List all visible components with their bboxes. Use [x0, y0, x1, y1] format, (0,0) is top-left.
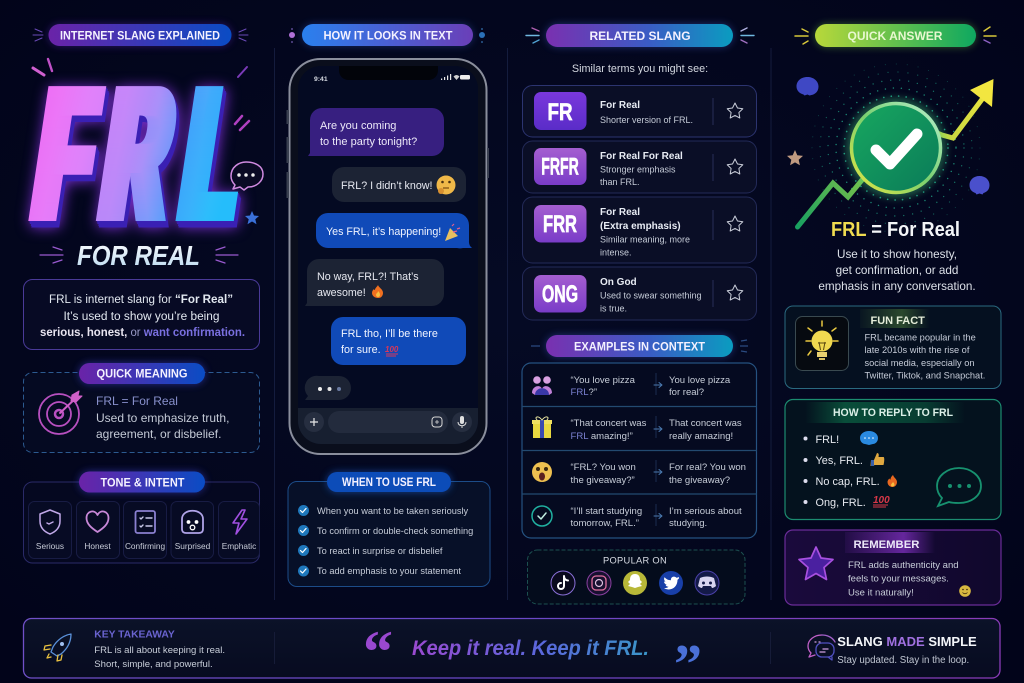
quick answer text: emphasis in any conversation.: [818, 280, 976, 293]
pill heading: related slang: [546, 24, 733, 47]
panel: quick meaning: [24, 363, 260, 452]
quick answer text: [818, 248, 976, 293]
panel: remember: [785, 530, 1001, 605]
fun fact text: [864, 332, 985, 380]
footer banner: [24, 618, 1000, 683]
panel: quick meaning: Used to emphasize truth,: [96, 411, 229, 425]
card: ONG: On God: [600, 277, 637, 288]
column: text conversation: [286, 24, 490, 586]
table: examples: for real?: [669, 387, 704, 398]
quick answer text: get confirmation, or add: [836, 264, 958, 277]
message: FRL I did not know: [332, 167, 466, 202]
pill heading: examples in context: EXAMPLES IN CONTEXT: [574, 339, 706, 353]
icon: twitter: [659, 571, 683, 595]
icon: star: [799, 547, 833, 580]
panel: when to use FRL: [288, 472, 490, 586]
checklist: To react in surprise or disbelief: [317, 546, 443, 556]
message: FRL tho: 100: [385, 345, 399, 354]
tone labels: Surprised: [175, 541, 211, 551]
card: ONG: Used to swear something: [600, 290, 702, 300]
pill heading: internet slang explained: INTERNET SLANG EXPLAINED: [60, 28, 220, 42]
remember text: Use it naturally!: [848, 588, 914, 598]
icon: target: [39, 391, 82, 434]
icon: instagram: [587, 571, 611, 595]
reply list: No cap, FRL.: [816, 476, 880, 488]
table: examples: tomorrow, FRL.”: [570, 518, 639, 529]
pill heading: when to use: WHEN TO USE FRL: [342, 475, 436, 489]
icon: tiktok: [551, 571, 575, 595]
quick answer text: Use it to show honesty,: [837, 248, 957, 261]
subtitle: for real: FOR REAL: [77, 240, 200, 271]
card: FRR: For Real: [600, 207, 640, 218]
fun fact text: Twitter, Tiktok, and Snapchat.: [864, 370, 985, 380]
fun fact text: social media, especially on: [864, 358, 975, 368]
checklist: To confirm or double-check something: [317, 526, 473, 536]
card: ONG: [522, 267, 756, 320]
definition panel: [24, 280, 260, 350]
panel: tone and intent: [24, 472, 260, 563]
message: no way: [305, 259, 444, 306]
slang made simple text: Stay updated. Stay in the loop.: [837, 655, 969, 666]
icon: chat bubbles: [808, 635, 835, 660]
message: FRL tho: [331, 317, 466, 365]
panel: quick meaning: agreement, or disbelief.: [96, 427, 221, 441]
tone labels: Emphatic: [222, 541, 256, 551]
message: FRL tho: for sure.: [341, 344, 381, 356]
message input bar: [298, 408, 478, 444]
card: FRR: intense.: [600, 248, 632, 258]
icon: smiley: [959, 585, 971, 597]
checklist: To add emphasis to your statement: [317, 566, 461, 576]
table: examples: FRL amazing!”: [570, 431, 633, 442]
pill heading: quick answer: QUICK ANSWER: [848, 29, 943, 43]
phone mockup: [286, 59, 489, 454]
card: FRR: (Extra emphasis): [600, 221, 681, 232]
status bar: 9:41: [314, 76, 328, 83]
pill heading: examples in context: [546, 335, 733, 357]
column: related slang: [522, 24, 756, 604]
reply list: FRL!: [816, 434, 839, 446]
key takeaway text: FRL is all about keeping it real.: [94, 645, 225, 656]
card: FRFR: Stronger emphasis: [600, 164, 676, 174]
reply list: Ong, FRL.: [816, 497, 866, 509]
table: examples: You love pizza: [669, 375, 731, 386]
panel: quick meaning: FRL = For Real: [96, 394, 178, 408]
decorative sparks around title: [33, 59, 249, 130]
phone screen: [298, 66, 478, 444]
card: FRFR: [522, 141, 756, 193]
quote: [363, 619, 702, 683]
table: examples: “That concert was: [570, 418, 647, 429]
icon: green chat bubble: [937, 468, 981, 506]
pill heading: when to use: [327, 472, 451, 492]
phone notch: [339, 66, 438, 80]
card: FR: Shorter version of FRL.: [600, 115, 693, 125]
pill heading: internet slang explained: [48, 24, 232, 46]
pill heading: how it looks in text: HOW IT LOOKS IN TEXT: [324, 28, 453, 42]
icon: shocked emoji: [532, 462, 552, 482]
icon: rocket: [44, 634, 71, 661]
message: FRL I did not know: FRL? I didn’t know!: [341, 180, 432, 192]
icon: surprised face: [182, 511, 203, 533]
panel: popular on: [528, 550, 745, 604]
pill heading: tone and intent: TONE & INTENT: [100, 475, 185, 489]
fun fact text: late 2010s with the rise of: [864, 345, 970, 355]
growth arrow: [798, 79, 994, 227]
panel: remember: REMEMBER: [854, 539, 919, 551]
panel: popular on: POPULAR ON: [603, 556, 667, 566]
icon: heart: [86, 511, 108, 532]
message: are you coming: Are you coming: [320, 120, 396, 132]
quote: Keep it real. Keep it FRL.: [412, 637, 649, 660]
pill heading: how it looks in text: [302, 24, 473, 46]
icon: star: [245, 211, 259, 224]
icon: check circle: [532, 506, 552, 526]
card: FRFR: than FRL.: [600, 177, 640, 187]
table: examples: For real? You won: [669, 462, 746, 473]
intro text: Similar terms you might see:: [572, 63, 708, 75]
message: are you coming: [308, 108, 444, 156]
panel: fun fact: [785, 306, 1001, 388]
table: examples: That concert was: [669, 418, 742, 429]
dotted halo: [812, 64, 980, 232]
remember text: feels to your messages.: [848, 574, 949, 584]
panel: fun fact: FUN FACT: [870, 315, 925, 327]
card: FR: FR: [548, 99, 572, 126]
table: examples: [522, 363, 756, 538]
icon: chat bubbles and star: [787, 77, 990, 194]
definition panel: FRL is internet slang for “For Real”: [49, 292, 233, 306]
tone labels: Honest: [84, 541, 111, 551]
panel: how to reply: HOW TO REPLY TO FRL: [833, 407, 953, 419]
table: examples: “FRL? You won: [570, 462, 636, 473]
reply list: Yes, FRL.: [816, 455, 863, 467]
icon: snapchat: [623, 571, 647, 595]
card: ONG: is true.: [600, 304, 627, 314]
checklist: When you want to be taken seriously: [317, 506, 469, 516]
column: quick answer: [785, 24, 1001, 605]
table: examples: studying.: [669, 518, 707, 529]
tone labels: Serious: [36, 541, 64, 551]
table: examples: “I’ll start studying: [570, 506, 642, 517]
pill heading: quick meaning: QUICK MEANING: [96, 366, 188, 380]
card: FRR: Similar meaning, more: [600, 234, 690, 244]
icon: chat bubble: [231, 162, 263, 190]
remember text: FRL adds authenticity and: [848, 560, 959, 571]
checklist: [298, 505, 473, 576]
pill heading: related slang: RELATED SLANG: [589, 29, 691, 43]
card: FRR: [522, 197, 756, 263]
tone labels: Confirming: [125, 541, 165, 551]
icon: lightning: [233, 510, 247, 534]
definition panel: serious, honest, or want confirmation.: [40, 325, 245, 339]
tone labels: [36, 541, 256, 551]
remember text: [848, 560, 959, 598]
pill heading: quick answer: [815, 24, 976, 47]
table: examples: I’m serious about: [669, 506, 742, 517]
key takeaway text: [94, 630, 225, 670]
title: FRL: FRL: [26, 52, 254, 256]
message: yes FRL: [316, 213, 472, 248]
card: FRR: FRR: [543, 211, 577, 238]
message: are you coming: to the party tonight?: [320, 136, 417, 148]
typing indicator: [305, 376, 351, 400]
key takeaway text: KEY TAKEAWAY: [94, 630, 175, 640]
icon: discord: [695, 571, 719, 595]
table: examples: the giveaway?”: [570, 475, 635, 486]
panel: how to reply: [785, 400, 1001, 520]
card: FRFR: For Real For Real: [600, 151, 683, 162]
status bar: [314, 74, 470, 83]
heading: FRL equals for real: FRL = For Real: [831, 218, 960, 241]
icon: checklist: [136, 511, 155, 533]
column: meaning: [24, 24, 263, 563]
icon: check badge: [846, 98, 946, 198]
pill heading: tone and intent: [79, 472, 205, 492]
icon: light bulb: [796, 316, 848, 370]
fun fact text: FRL became popular in the: [864, 332, 976, 342]
reply list: [804, 431, 897, 509]
table: examples: FRL?”: [570, 387, 597, 398]
definition panel: It’s used to show you’re being: [64, 309, 220, 323]
card: FR: For Real: [600, 100, 640, 111]
card: FRFR: FRFR: [541, 154, 579, 180]
icon: shield: [40, 510, 60, 534]
message: yes FRL: Yes FRL, it’s happening!: [326, 226, 441, 238]
message: FRL tho: FRL tho, I’ll be there: [341, 328, 438, 340]
table: examples: really amazing!: [669, 431, 733, 442]
icon: people: [532, 376, 552, 395]
pill heading: quick meaning: [79, 363, 205, 384]
icon: gift: [532, 417, 552, 438]
key takeaway text: Short, simple, and powerful.: [94, 659, 213, 670]
message: no way: awesome!: [317, 287, 366, 299]
reply list: 100: [873, 495, 890, 506]
table: examples: the giveaway?: [669, 475, 730, 486]
slang made simple text: [837, 634, 977, 666]
card: ONG: ONG: [542, 281, 578, 308]
slang made simple text: SLANG MADE SIMPLE: [837, 634, 977, 649]
message: no way: No way, FRL?! That’s: [317, 271, 419, 283]
card: FR: [522, 86, 756, 137]
table: examples: “You love pizza: [570, 375, 636, 386]
